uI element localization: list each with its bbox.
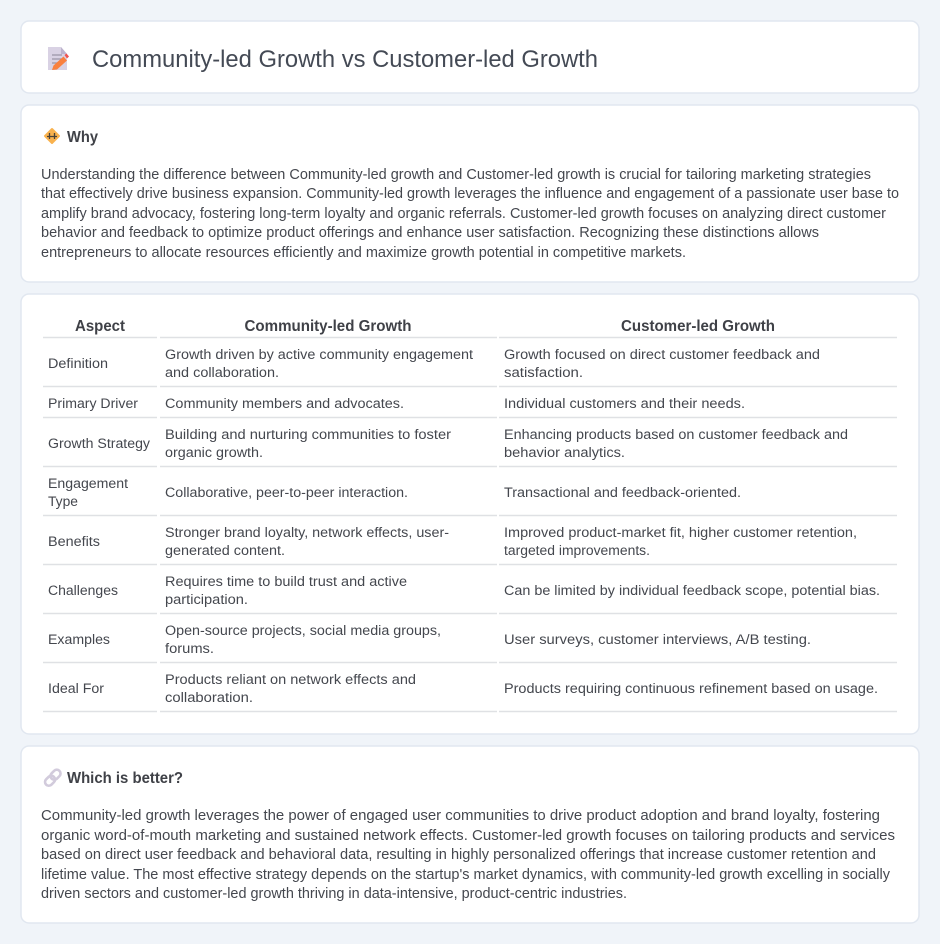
panel: header [21,21,919,93]
row: engagement type: Type [48,494,78,510]
row: benefits: generated content. [165,543,285,559]
row: benefits: Stronger brand loyalty, network effects, user- [165,525,449,541]
row: definition [43,347,897,386]
row: ideal for: Products requiring continuous refinement based on usage. [504,681,878,697]
row: challenges: participation. [165,592,248,608]
title: Community-led Growth vs Customer-led Growth [92,46,598,73]
row: growth strategy: Growth Strategy [48,436,151,452]
row: growth strategy: organic growth. [165,445,263,461]
row: benefits: Benefits [48,534,100,550]
row: primary driver: Community members and advocates. [165,396,404,412]
row: challenges: Can be limited by individual feedback scope, potential bias. [504,583,880,599]
panel: which is better [21,746,919,923]
panel: why [21,105,919,282]
row: challenges: Challenges [48,583,118,599]
row: benefits [43,525,897,564]
text block: which paragraph: based on direct user feedback and behavioral data, resulting in highly personalized offerings that increase customer retention and [41,847,876,863]
text block: which paragraph [41,808,895,902]
row: growth strategy: Building and nurturing communities to foster [165,427,451,443]
row: ideal for: collaboration. [165,690,253,706]
heading: why: Why [67,129,98,146]
text block: why paragraph: amplify brand advocacy, fostering long-term loyalty and organic referrals. Customer-led growth focuses on analyzing direct customer [41,206,886,222]
row: definition: Growth focused on direct customer feedback and [504,347,820,363]
row: engagement type [43,476,897,516]
icon: document with pencil [48,47,69,70]
text block: which paragraph: Community-led growth leverages the power of engaged user communities to drive product adoption and brand loyalty, fostering [41,808,880,824]
row: challenges: Requires time to build trust and active [165,574,407,590]
row: definition: satisfaction. [504,365,583,381]
icon: warning diamond [45,129,59,143]
row: definition: Growth driven by active community engagement [165,347,473,363]
row: ideal for [43,672,897,712]
text block: why paragraph: entrepreneurs to allocate resources efficiently and maximize growth potential in competitive markets. [41,245,686,261]
row: primary driver: Primary Driver [48,396,138,412]
text block: why paragraph [41,167,899,261]
text block: which paragraph: lifetime value. The most effective strategy depends on the startup's market dynamics, with community-led growth excelling in socially [41,867,891,883]
text block: why paragraph: behavior and feedback to optimize product offerings and enhance user satisfaction. Recognizing these distinctions allows [41,225,819,241]
row: engagement type: Transactional and feedback-oriented. [504,485,741,501]
heading: which is better: Which is better? [67,770,183,787]
text block: which paragraph: organic word-of-mouth marketing and sustained network effects. Customer-led growth focuses on tailoring products and services [41,828,895,844]
row: benefits: Improved product-market fit, higher customer retention, [504,525,857,541]
row: engagement type: Engagement [48,476,128,492]
panel: comparison table [21,294,919,734]
row: examples: Open-source projects, social media groups, [165,623,441,639]
text block: which paragraph: driven sectors and customer-led growth thriving in data-intensive, product-centric industries. [41,886,627,902]
table header: Community-led Growth [244,318,412,335]
row: engagement type: Collaborative, peer-to-peer interaction. [165,485,408,501]
row: examples: forums. [165,641,214,657]
row: primary driver: Individual customers and their needs. [504,396,745,412]
text block: why paragraph: Understanding the difference between Community-led growth and Customer-led growth is crucial for tailoring marketing strategies [41,167,871,183]
table header: Aspect [75,318,125,335]
text block: why paragraph: that effectively drive business expansion. Community-led growth leverages the influence and engagement of a passionate user base to [41,186,899,202]
row: definition: Definition [48,356,108,372]
table header [43,318,897,338]
row: examples [43,623,897,662]
row: examples: Examples [48,632,110,648]
row: challenges [43,574,897,614]
row: growth strategy [43,427,897,466]
row: examples: User surveys, customer interviews, A/B testing. [504,632,811,648]
row: definition: and collaboration. [165,365,279,381]
row: growth strategy: Enhancing products based on customer feedback and [504,427,848,443]
row: benefits: targeted improvements. [504,543,650,559]
icon: link [43,768,62,787]
table header: Customer-led Growth [621,318,775,335]
row: ideal for: Ideal For [48,681,104,697]
row: primary driver [43,396,897,418]
row: ideal for: Products reliant on network effects and [165,672,416,688]
row: growth strategy: behavior analytics. [504,445,625,461]
